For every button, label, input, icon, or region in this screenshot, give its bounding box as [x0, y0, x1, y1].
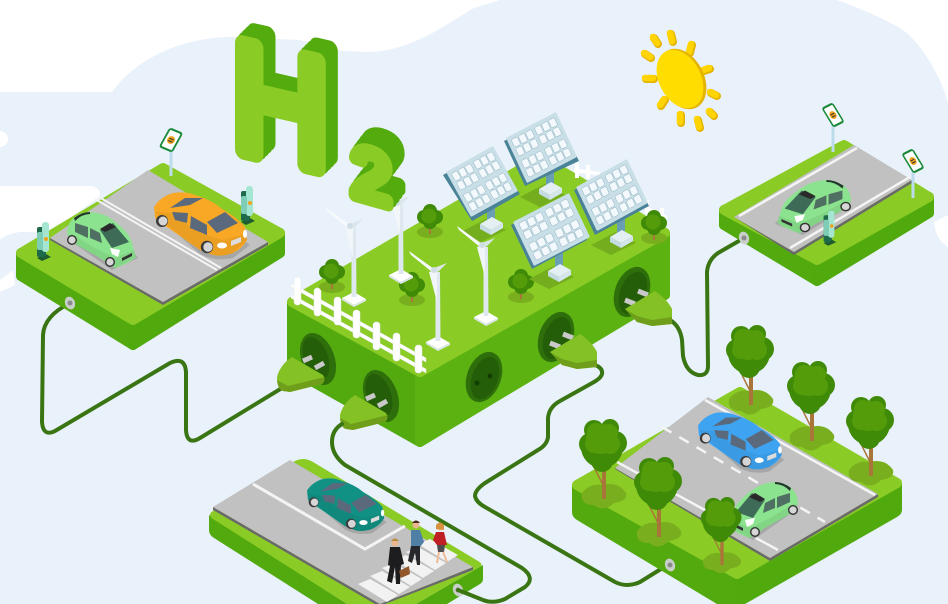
- panel: central power block: [277, 112, 672, 442]
- background: white notch on left: [0, 270, 15, 292]
- letter H: H: [232, 9, 329, 203]
- parking asphalt: [50, 170, 268, 305]
- businessman with briefcase: [387, 538, 410, 584]
- platform sides: [21, 168, 280, 345]
- plug 2: [340, 395, 388, 430]
- trees: [579, 325, 894, 573]
- crosswalk: [358, 539, 458, 602]
- subscript 2: 2: [351, 130, 391, 222]
- green car: [727, 482, 798, 540]
- back fence fragments: [574, 160, 667, 220]
- green car: [67, 212, 138, 270]
- charging post right: [241, 186, 255, 225]
- teal car: [307, 478, 387, 534]
- panel: lower right road platform: [572, 325, 902, 604]
- road: [734, 145, 912, 255]
- icon: sun: [644, 33, 717, 128]
- cable connector: [663, 557, 677, 573]
- platform sides and top: [572, 392, 902, 604]
- pedestrians: [387, 520, 447, 584]
- cable: central plug to crossing platform: [332, 424, 530, 602]
- solar panels: [443, 112, 649, 269]
- wind turbines: [325, 184, 498, 351]
- plug 4: [625, 291, 672, 326]
- cable: left platform to central plug: [42, 303, 282, 441]
- cable connector: [63, 295, 77, 311]
- orange car: [154, 192, 250, 259]
- sockets: [293, 262, 657, 427]
- platform sides and top: [724, 145, 929, 281]
- bushes: [319, 204, 667, 306]
- cable connector: [737, 230, 751, 246]
- white picket fence: [291, 277, 426, 373]
- background: white nub on left: [0, 131, 8, 147]
- parking sign: [160, 128, 182, 176]
- panel: left parking platform: [21, 128, 280, 345]
- sign right: [903, 149, 923, 198]
- plug 1: [277, 357, 325, 392]
- charging post: [824, 211, 836, 246]
- road: [615, 397, 878, 561]
- blue car: [698, 412, 784, 473]
- woman in red jacket: [433, 522, 447, 563]
- charging post left: [37, 222, 51, 261]
- green car charging: [775, 180, 851, 235]
- platform sides and top: [209, 459, 483, 604]
- background: white band on left: [0, 186, 100, 240]
- man in blue sweater: [408, 520, 424, 565]
- cable: central plug to tree road platform: [475, 365, 669, 585]
- plug 3: [550, 334, 597, 369]
- cable: central plug to charging platform: [670, 238, 744, 375]
- panel: lower left crossing platform: [209, 459, 483, 604]
- road: [213, 460, 473, 604]
- panel: top right charging platform: [724, 103, 929, 281]
- block sides: [292, 158, 665, 442]
- sign left: [823, 103, 843, 152]
- cable connector: [451, 582, 465, 598]
- solar panel stands: [461, 171, 636, 289]
